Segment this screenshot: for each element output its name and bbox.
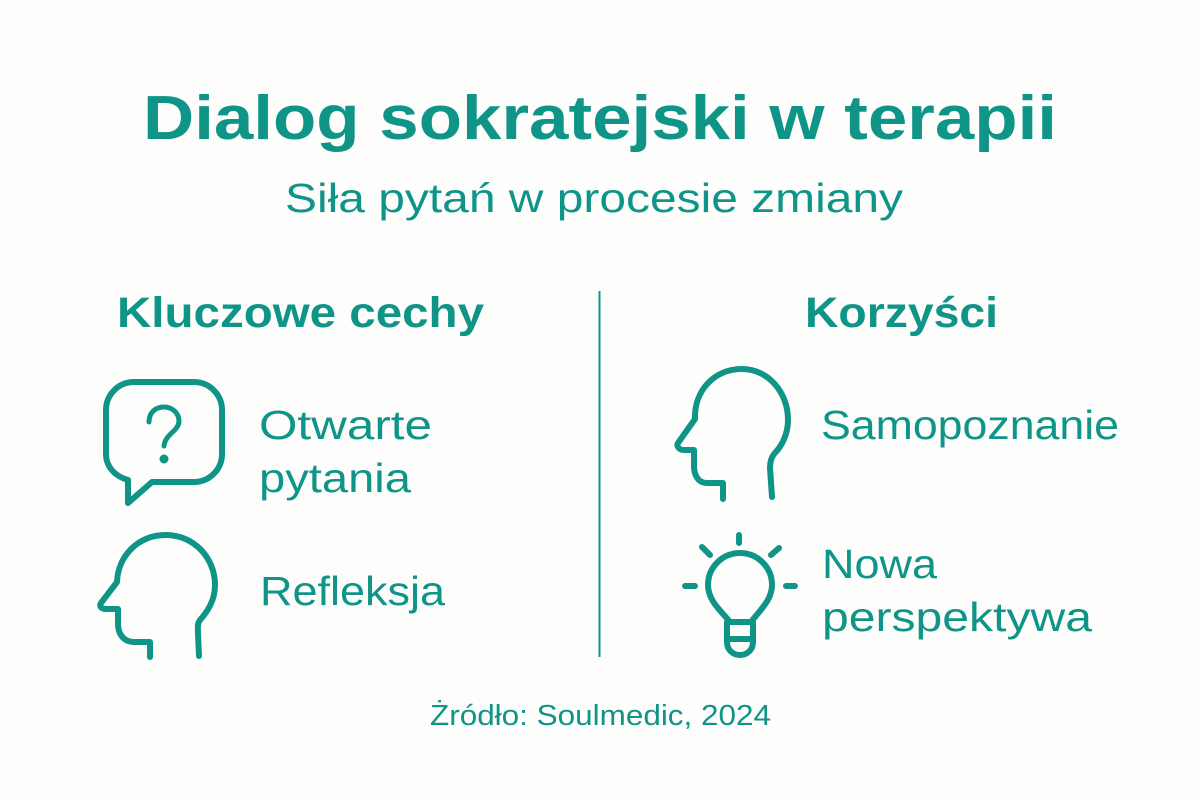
divider xyxy=(598,291,600,657)
item: open questions xyxy=(106,382,443,503)
heading: key features: Kluczowe cechy xyxy=(117,289,484,337)
label: reflection: Refleksja xyxy=(260,568,445,614)
label: open questions: pytania xyxy=(259,455,411,501)
label: new perspective: perspektywa xyxy=(822,594,1092,640)
panel: key features xyxy=(100,289,484,657)
title: Dialog sokratejski w terapii xyxy=(143,84,1057,153)
heading: benefits: Korzyści xyxy=(805,289,998,337)
label: self-knowledge: Samopoznanie xyxy=(821,402,1119,448)
source note: Żródło: Soulmedic, 2024 xyxy=(430,699,771,732)
label: new perspective: Nowa xyxy=(822,541,937,587)
icon: head profile xyxy=(100,535,215,657)
icon: head profile xyxy=(677,369,788,499)
item: new perspective xyxy=(685,535,1092,655)
item: reflection xyxy=(100,535,445,657)
subtitle: Siła pytań w procesie zmiany xyxy=(285,175,904,221)
icon: light bulb xyxy=(685,535,795,655)
item: self-knowledge xyxy=(677,369,1119,499)
panel: benefits xyxy=(677,289,1119,655)
icon: speech bubble with question mark xyxy=(106,382,222,503)
label: open questions: Otwarte xyxy=(259,402,432,448)
